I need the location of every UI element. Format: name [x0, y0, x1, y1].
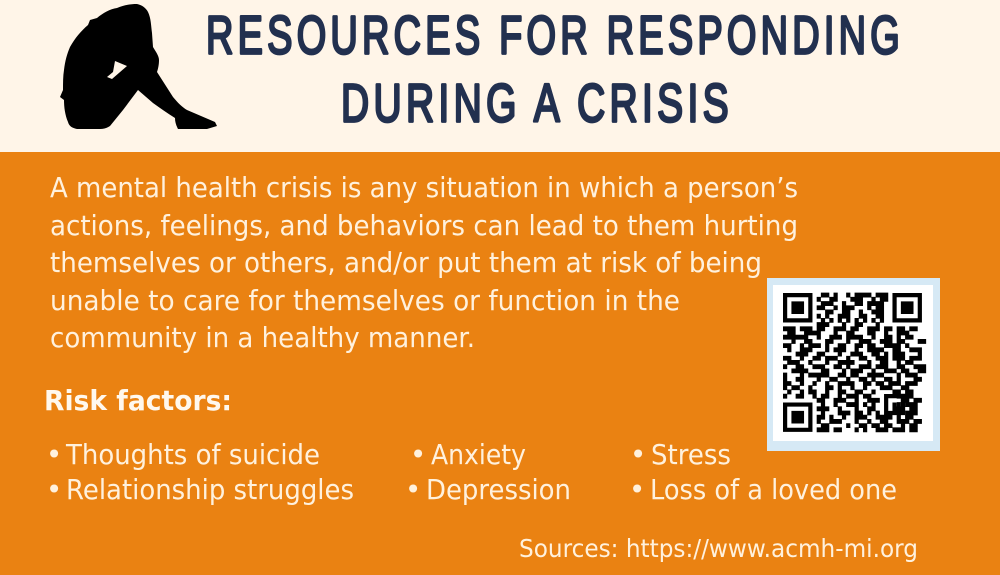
risk factor list: • [630, 439, 646, 471]
risk factor list: Anxiety [431, 439, 526, 471]
QR code [767, 278, 940, 451]
risk factor list: • [46, 439, 62, 471]
risk factor list: • [46, 474, 62, 506]
risk factor list [46, 439, 897, 506]
risk factor list: Loss of a loved one [650, 474, 897, 506]
risk factor list: Stress [651, 439, 731, 471]
intro paragraph [50, 172, 798, 354]
intro paragraph: A mental health crisis is any situation in which a person’s [50, 172, 798, 204]
risk factor list: Thoughts of suicide [65, 439, 320, 471]
title: DURING A CRISIS [341, 74, 733, 134]
intro paragraph: themselves or others, and/or put them at risk of being [50, 247, 762, 279]
title [206, 6, 904, 134]
icon: silhouette of a person hugging knees [60, 4, 217, 129]
risk factor list: Relationship struggles [66, 474, 354, 506]
header band [0, 0, 1000, 152]
sources: Sources: https://www.acmh-mi.org [519, 534, 918, 563]
intro paragraph: unable to care for themselves or function in the [50, 285, 680, 317]
intro paragraph: actions, feelings, and behaviors can lead to them hurting [50, 210, 798, 242]
heading: risk factors: Risk factors: [44, 385, 232, 417]
risk factor list: Depression [426, 474, 571, 506]
risk factor list: • [410, 439, 426, 471]
risk factor list: • [405, 474, 421, 506]
risk factor list: • [629, 474, 645, 506]
orange panel [0, 152, 1000, 575]
intro paragraph: community in a healthy manner. [50, 322, 475, 354]
